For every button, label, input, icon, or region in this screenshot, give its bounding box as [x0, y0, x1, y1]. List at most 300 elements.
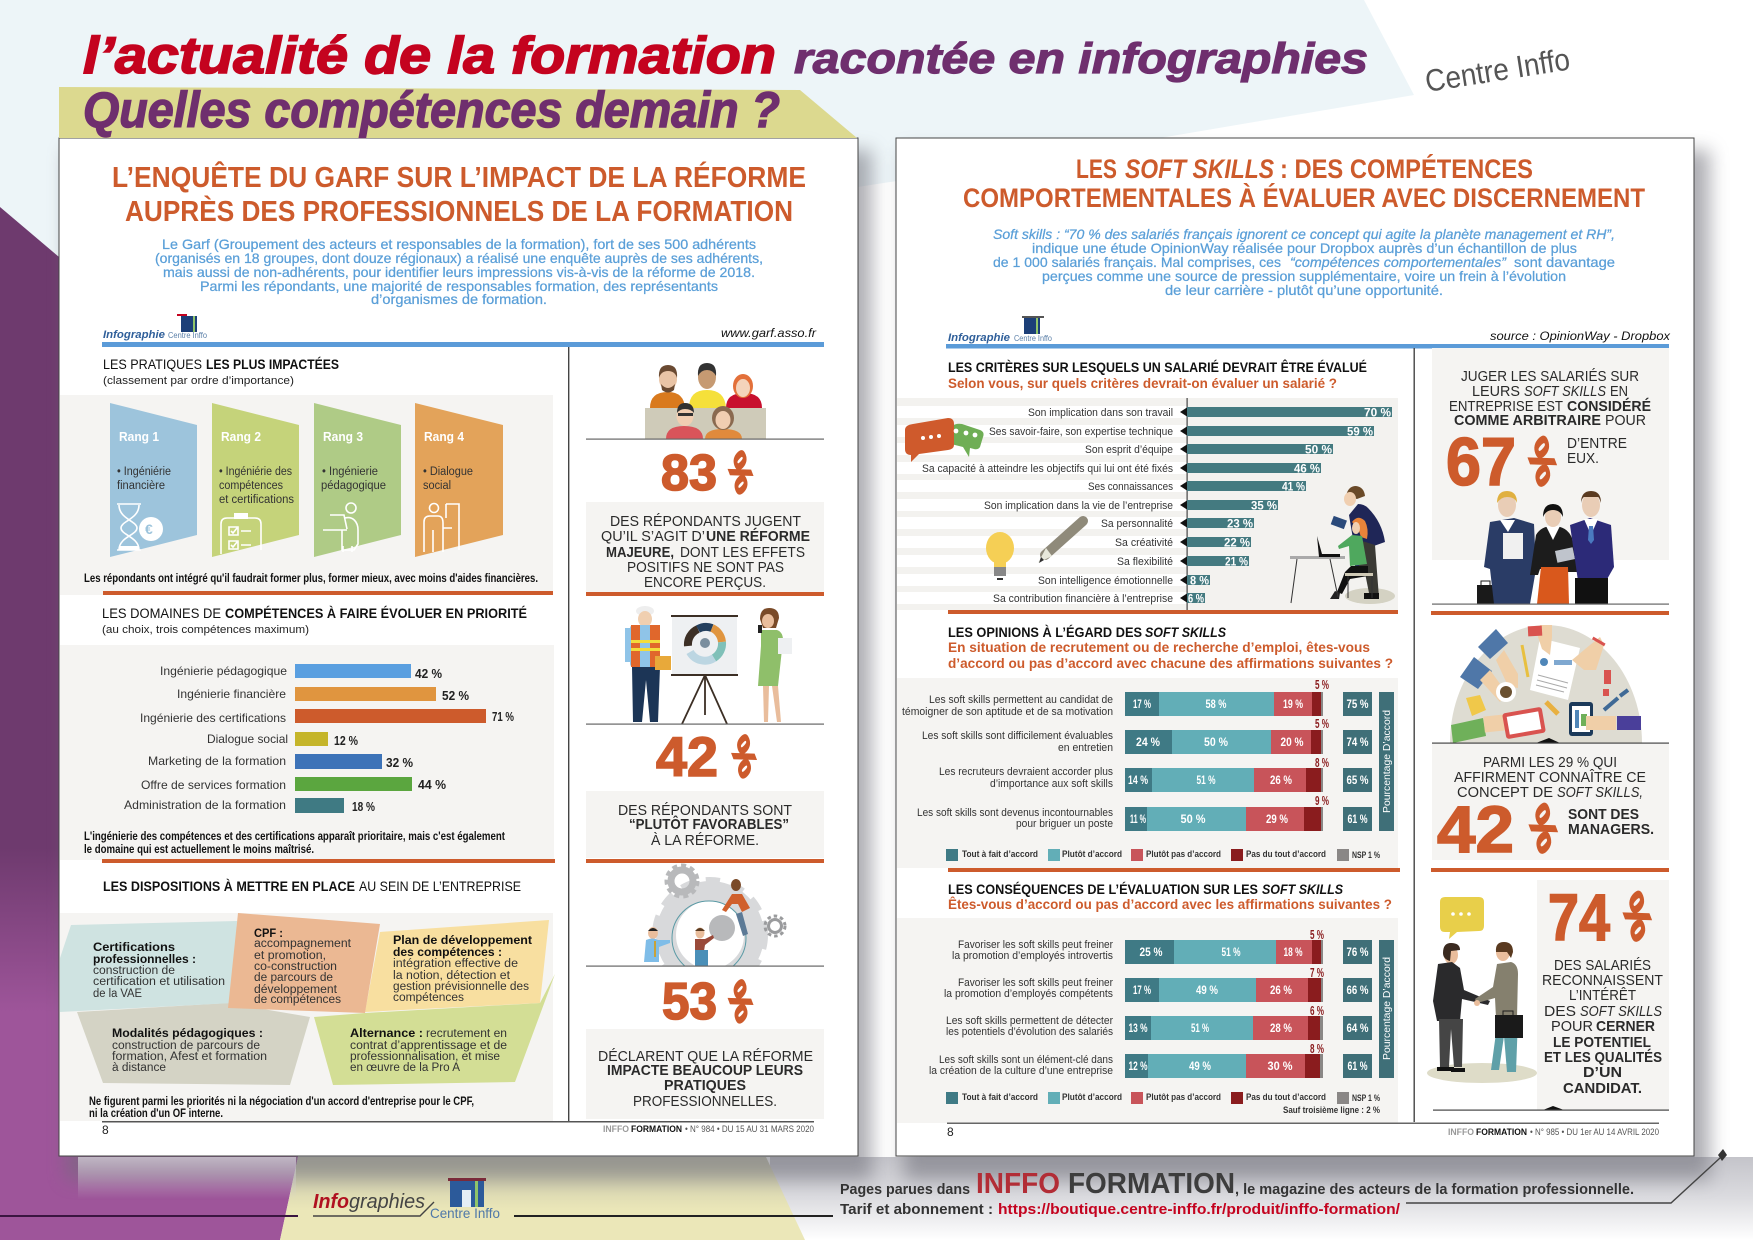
side label — [1379, 692, 1394, 831]
horizontal bar chart: 6 % — [1188, 592, 1204, 606]
horizontal bar chart: 22 % — [1224, 536, 1250, 550]
sidebar stat: 67 %: ENTREPRISE EST — [1449, 398, 1563, 415]
row 1: Les soft skills permettent au candidat de — [929, 694, 1113, 706]
legend: Plutôt d’accord — [1062, 1092, 1122, 1103]
legend: Sauf troisième ligne : 2 % — [1283, 1105, 1380, 1116]
sidebar stat: 67 %: EN — [1610, 383, 1628, 400]
section heading — [948, 625, 1393, 671]
bar chart: 52 % — [442, 688, 469, 703]
sidebar stat: 67 %: 67 — [1446, 424, 1516, 500]
text block: 53 — [586, 1029, 824, 1119]
block: CPF: CPF : — [254, 928, 283, 940]
row 3: Les soft skills permettent de détecter — [946, 1015, 1113, 1027]
rank 3: Rang 3 — [323, 430, 363, 444]
sidebar stat: 67 %: POUR — [1605, 412, 1646, 429]
stat: 83 %: % — [722, 443, 759, 502]
row 4: 61 % — [1348, 814, 1368, 826]
section heading: SOFT SKILLS — [1262, 882, 1343, 897]
footer: • N° 984 • DU 15 AU 31 MARS 2020 — [685, 1124, 814, 1134]
row 4: Les soft skills sont devenus incontournables — [917, 807, 1113, 819]
block: certifications: construction de — [93, 965, 175, 977]
row 3: 26 % — [1270, 775, 1292, 787]
row 2: Favoriser les soft skills peut freiner — [958, 977, 1113, 989]
section heading — [102, 606, 527, 636]
horizontal bar chart: Son implication dans la vie de l’entreprise — [984, 500, 1173, 512]
stat: 83 %: 83 — [661, 444, 717, 501]
rank 1: • Ingéniérie — [117, 466, 171, 478]
legend: NSP 1 % — [1352, 1093, 1380, 1104]
page heading: L’ENQUÊTE DU GARF SUR L’IMPACT DE LA RÉFORME — [112, 160, 806, 194]
panel: right page — [896, 138, 1694, 1156]
sidebar stat: 67 %: COMME ARBITRAIRE — [1454, 412, 1601, 429]
legend: Tout à fait d’accord — [962, 1092, 1038, 1103]
intro text: sont davantage — [1514, 254, 1615, 270]
text block: 83: POSITIFS NE SONT PAS — [627, 559, 784, 576]
sidebar stat: 42 %: CONCEPT DE — [1457, 784, 1553, 801]
block: CPF: et promotion, — [254, 950, 326, 962]
row 4: 29 % — [1266, 814, 1288, 826]
infographie credit — [103, 314, 207, 341]
infographie credit: Centre Inffo — [1014, 333, 1052, 343]
row 4: la création de la culture d’une entreprise — [929, 1065, 1113, 1077]
section: critères — [897, 360, 1398, 610]
rank 3 — [314, 403, 401, 557]
stat: 83 % — [661, 443, 759, 502]
legend — [946, 1092, 1380, 1116]
row 1 — [952, 927, 1372, 964]
horizontal bar chart: Sa flexibilité — [1117, 556, 1173, 568]
section: dispositions — [60, 879, 555, 1121]
row 3: 14 % — [1128, 775, 1148, 787]
bar chart: Dialogue social — [207, 732, 288, 746]
sidebar stat: 74 %: ET LES QUALITÉS — [1544, 1049, 1662, 1066]
row 1: 17 % — [1133, 699, 1151, 711]
section heading: LES OPINIONS À L’ÉGARD DES — [948, 625, 1142, 640]
text block: 53: DÉCLARENT QUE LA RÉFORME — [598, 1048, 813, 1065]
intro text: mais aussi de non-adhérents, pour identifier leurs impressions vis-à-vis de la réforme de 2018. — [163, 264, 755, 280]
sidebar stat: 67 %: EUX. — [1567, 450, 1599, 467]
horizontal bar chart: Sa contribution financière à l’entreprise — [993, 593, 1173, 605]
footer: FORMATION — [631, 1124, 682, 1134]
footer — [1448, 1127, 1659, 1137]
horizontal bar chart: 35 % — [1251, 498, 1277, 512]
sidebar stat: 67 %: LEURS — [1472, 383, 1520, 400]
sidebar stat: 67 % — [1432, 348, 1669, 604]
section heading: (classement par ordre d’importance) — [103, 375, 294, 387]
footer: magazine credit — [840, 1168, 1634, 1218]
legend: Plutôt pas d’accord — [1146, 849, 1221, 860]
block: modalités — [77, 1003, 310, 1085]
row 4 — [917, 793, 1372, 831]
row 2: 50 % — [1204, 737, 1228, 749]
row 4: pour briguer un poste — [1016, 818, 1113, 830]
text block: 53: PRATIQUES — [664, 1077, 746, 1094]
footer: FORMATION — [1476, 1127, 1527, 1137]
row 3: 51 % — [1191, 1023, 1209, 1035]
side label: Pourcentage D’accord — [1381, 957, 1393, 1060]
sidebar stat: 74 %: RECONNAISSENT — [1542, 972, 1663, 989]
horizontal bar chart: Son implication dans son travail — [1028, 407, 1173, 419]
main title — [83, 27, 1368, 85]
sidebar stat: 74 %: CERNER — [1596, 1018, 1655, 1035]
icon: hourglass and euro — [117, 504, 163, 550]
row 1: 76 % — [1346, 947, 1368, 959]
row 4 — [929, 1041, 1372, 1078]
rank 4 — [415, 403, 503, 557]
block: certifications — [60, 921, 237, 1012]
sidebar stat: 67 %: CONSIDÉRÉ — [1567, 398, 1651, 415]
sidebar stat: 74 %: POUR — [1551, 1018, 1593, 1035]
footer: magazine credit: INFFO — [976, 1168, 1060, 1200]
sidebar stat: 42 %: 42 — [1437, 792, 1514, 866]
section heading: LES DOMAINES DE — [102, 606, 221, 621]
sidebar stat: 74 %: LE POTENTIEL — [1553, 1034, 1651, 1051]
text block: 53: IMPACTE BEAUCOUP LEURS — [607, 1062, 803, 1079]
block: alternance: en œuvre de la Pro A — [350, 1062, 460, 1074]
row 3: les potentiels d’évolution des salariés — [946, 1026, 1113, 1038]
stat: 42 %: 42 — [656, 725, 718, 788]
text block: 42 — [586, 791, 824, 858]
row 2: en entretien — [1058, 742, 1113, 754]
block: plan: Plan de développement — [393, 935, 532, 947]
intro text: perçues comme une source de pression supplémentaire, voire un frein à l’évolution — [1042, 268, 1566, 284]
text block: 83: ENCORE PERÇUS. — [644, 574, 766, 591]
illustration: audience — [645, 363, 766, 439]
intro text: (organisés en 18 groupes, dont douze régionaux) a réalisé une enquête auprès de ses adhérents, — [155, 250, 763, 266]
panel: left page — [59, 138, 858, 1156]
horizontal bar chart: Sa créativité — [1115, 537, 1173, 549]
row 3: d’importance aux soft skills — [990, 778, 1113, 790]
arrow — [1406, 1149, 1727, 1203]
main title: l’actualité de la formation — [83, 27, 776, 85]
row 1: témoigner de son aptitude et de sa motivation — [902, 706, 1113, 718]
block: plan: compétences — [393, 992, 464, 1004]
block: alternance — [314, 974, 555, 1085]
intro text: d’organismes de formation. — [371, 291, 547, 307]
block: CPF: accompagnement — [254, 938, 352, 950]
bar chart: 44 % — [418, 777, 446, 792]
intro text: indique une étude OpinionWay réalisée pour Dropbox auprès d’un échantillon de plus — [1032, 240, 1577, 256]
row 3 — [939, 755, 1372, 792]
sidebar stat: 74 %: L’INTÉRÊT — [1569, 987, 1636, 1004]
stat: 53 % — [662, 972, 759, 1031]
row 3: Les recruteurs devraient accorder plus — [939, 766, 1113, 778]
block: certifications: certification et utilisation — [93, 976, 225, 988]
footer band: infographies logo: Info — [313, 1191, 349, 1213]
rank 4: Rang 4 — [424, 430, 464, 444]
section heading — [948, 882, 1392, 912]
rank 2: compétences — [219, 480, 283, 492]
sidebar stat: 42 % — [1432, 744, 1669, 866]
block: alternance: recrutement en — [426, 1028, 507, 1040]
horizontal bar chart: Ses savoir-faire, son expertise technique — [989, 426, 1173, 438]
sidebar stat: 67 %: % — [1521, 427, 1564, 496]
illustration: handshake — [1427, 897, 1537, 1083]
page heading — [963, 153, 1645, 213]
legend: Tout à fait d’accord — [962, 849, 1038, 860]
sidebar stat: 42 %: SOFT SKILLS, — [1557, 784, 1643, 801]
bar chart: 42 % — [415, 666, 442, 681]
flip chart — [671, 615, 738, 724]
footer: magazine credit: Tarif et abonnement : — [840, 1201, 993, 1218]
bar chart: 71 % — [492, 709, 514, 724]
sidebar stat: 74 %: CANDIDAT. — [1563, 1080, 1642, 1097]
horizontal bar chart: 50 % — [1305, 442, 1332, 456]
intro text: Le Garf (Groupement des acteurs et responsables de la formation), fort de ses 500 adhérents — [162, 236, 756, 252]
icon: bulb and pencil — [986, 521, 1083, 580]
row 3: 8 % — [1315, 755, 1329, 770]
block: CPF — [228, 913, 380, 1013]
section heading: LES PLUS IMPACTÉES — [206, 357, 339, 372]
row 2: Les soft skills sont difficilement évaluables — [922, 730, 1113, 742]
row 1: 5 % — [1310, 927, 1324, 942]
text block: 83: DONT LES EFFETS — [680, 544, 805, 561]
row 2 — [922, 716, 1372, 754]
section: conséquences — [897, 882, 1398, 1123]
icon: person at door — [424, 504, 459, 552]
legend: Plutôt d’accord — [1062, 849, 1122, 860]
side label — [1379, 940, 1394, 1078]
bar chart: 18 % — [352, 799, 375, 814]
block: alternance: contrat d’apprentissage et de — [350, 1040, 507, 1052]
stat: 42 %: % — [725, 727, 763, 786]
section heading: (au choix, trois compétences maximum) — [102, 624, 309, 636]
footer: • N° 985 • DU 1er AU 14 AVRIL 2020 — [1530, 1127, 1659, 1137]
illustration: three professionals — [1477, 491, 1614, 604]
text block: 83 — [586, 502, 824, 592]
row 2: 7 % — [1310, 965, 1324, 980]
text block: 42: À LA RÉFORME. — [651, 832, 759, 849]
legend: Pas du tout d’accord — [1246, 1092, 1326, 1103]
section heading: En situation de recrutement ou de recherche d’emploi, êtes-vous — [948, 640, 1370, 655]
row 2: 20 % — [1280, 737, 1304, 749]
block: CPF: développement — [254, 984, 338, 996]
block: modalités: formation, Afest et formation — [112, 1051, 267, 1063]
row 2: 74 % — [1346, 737, 1368, 749]
page heading: LES — [1076, 154, 1117, 184]
sidebar stat: 74 %: % — [1616, 882, 1659, 951]
row 1: 58 % — [1206, 699, 1226, 711]
block: certifications: Certifications — [93, 942, 175, 954]
row 4: 30 % — [1268, 1061, 1292, 1073]
section heading — [103, 879, 521, 894]
worker — [625, 606, 671, 722]
subtitle banner: Quelles compétences demain ? — [83, 82, 780, 138]
bar chart: 12 % — [334, 733, 358, 748]
section heading: COMPÉTENCES À FAIRE ÉVOLUER EN PRIORITÉ — [225, 606, 527, 621]
intro text — [155, 236, 763, 307]
infographie credit — [948, 316, 1052, 344]
rank 1 — [110, 403, 197, 557]
row 3: 51 % — [1196, 775, 1216, 787]
rank 2: et certifications — [219, 494, 294, 506]
sidebar stat: 42 %: MANAGERS. — [1568, 821, 1654, 838]
legend: Pas du tout d’accord — [1246, 849, 1326, 860]
horizontal bar chart: Sa personnalité — [1101, 518, 1173, 530]
icon: hourglass and euro: € — [145, 521, 153, 537]
section heading: LES DISPOSITIONS À METTRE EN PLACE — [103, 879, 355, 894]
horizontal bar chart: 70 % — [1364, 406, 1391, 420]
page heading — [112, 160, 806, 228]
row 4: Les soft skills sont un élément-clé dans — [939, 1054, 1113, 1066]
horizontal bar chart: Sa capacité à atteindre les objectifs qui lui ont été fixés — [922, 463, 1173, 475]
legend: Plutôt pas d’accord — [1146, 1092, 1221, 1103]
row 1: 5 % — [1315, 677, 1329, 692]
infographie credit: Infographie — [103, 329, 165, 341]
sidebar stat: 74 %: DES SALARIÉS — [1554, 957, 1651, 974]
block: plan: intégration effective de — [393, 958, 518, 970]
row 4: 49 % — [1189, 1061, 1211, 1073]
block: certifications: de la VAE — [93, 988, 142, 1000]
bar chart: Ingénierie financière — [177, 687, 286, 701]
stacked bar chart — [902, 677, 1394, 831]
horizontal bar chart: 41 % — [1282, 480, 1305, 494]
illustration: colleagues at desk — [1290, 486, 1395, 604]
text block: 83: QU’IL S’AGIT D’ — [601, 528, 705, 545]
sidebar stat: 42 %: SONT DES — [1568, 806, 1639, 823]
text block: 53: PROFESSIONNELLES. — [633, 1093, 777, 1110]
row 4: 9 % — [1315, 793, 1329, 808]
row 1: Favoriser les soft skills peut freiner — [958, 939, 1113, 951]
footer: magazine credit: , le magazine des acteurs de la formation professionnelle. — [1235, 1181, 1634, 1198]
horizontal bar chart: 46 % — [1294, 462, 1320, 476]
row 2: 49 % — [1196, 985, 1218, 997]
rank 2 — [212, 403, 299, 557]
block: modalités: à distance — [112, 1062, 166, 1074]
intro text: de 1 000 salariés français. Mal comprises, ces — [993, 254, 1281, 270]
block: CPF: de compétences — [254, 994, 341, 1006]
section: opinions — [897, 625, 1398, 868]
rank 2: • Ingéniérie des — [219, 466, 292, 478]
row 4: 50 % — [1180, 814, 1206, 826]
text block: 42: “PLUTÔT FAVORABLES” — [629, 815, 789, 833]
infographie credit: Infographie — [948, 332, 1010, 344]
stat: 53 %: % — [722, 972, 759, 1031]
row 2 — [944, 965, 1372, 1002]
rank 2: Rang 2 — [221, 430, 261, 444]
sidebar stat: 42 %: AFFIRMENT CONNAÎTRE CE — [1454, 769, 1646, 786]
row 3: 28 % — [1270, 1023, 1292, 1035]
legend — [946, 849, 1380, 861]
page number: 8 — [947, 1125, 954, 1139]
horizontal bar chart — [922, 406, 1392, 606]
section: pratiques — [60, 357, 553, 595]
bar chart: Ingénierie pédagogique — [160, 664, 287, 678]
stat: 53 %: 53 — [662, 973, 717, 1031]
sidebar stat: 74 %: SOFT SKILLS — [1580, 1003, 1662, 1020]
stat: 42 % — [656, 725, 763, 788]
row 1: 51 % — [1222, 947, 1240, 959]
section heading — [948, 360, 1367, 391]
bar chart — [124, 664, 514, 814]
row 2: 17 % — [1133, 985, 1151, 997]
rank 1: financière — [117, 480, 165, 492]
footer band: infographies logo — [0, 1178, 833, 1221]
block: plan — [365, 920, 549, 1012]
footer — [603, 1124, 814, 1134]
intro text — [993, 226, 1615, 298]
sidebar stat: 74 %: DES — [1544, 1003, 1576, 1020]
legend: NSP 1 % — [1352, 850, 1380, 861]
stacked bar chart — [929, 927, 1394, 1078]
row 2: 66 % — [1346, 985, 1368, 997]
infographie credit: Centre Inffo — [168, 330, 207, 340]
icon: clipboard — [221, 513, 261, 554]
text block: 42: DES RÉPONDANTS SONT — [618, 802, 792, 819]
sidebar stat: 67 %: D’ENTRE — [1567, 435, 1627, 452]
note: ni la création d'un OF interne. — [89, 1108, 223, 1120]
note: le domaine qui est actuellement le moins maîtrisé. — [84, 844, 314, 856]
footer band: infographies logo: Centre Inffo — [430, 1205, 500, 1221]
footer: INFFO — [603, 1124, 629, 1134]
woman — [758, 608, 792, 722]
horizontal bar chart: 21 % — [1225, 554, 1248, 568]
people — [644, 879, 750, 966]
intro text: Parmi les répondants, une majorité de responsables formation, des représentants — [200, 278, 718, 294]
row 3: 65 % — [1346, 775, 1368, 787]
footer band: infographies logo: graphies — [349, 1191, 425, 1213]
main title: racontée en infographies — [794, 35, 1368, 83]
note: Les répondants ont intégré qu'il faudrait former plus, former mieux, avec moins d'aides financières. — [84, 573, 538, 585]
side label: Pourcentage D’accord — [1381, 710, 1393, 813]
illustration: hands around table — [1450, 625, 1642, 742]
footer: magazine credit: https://boutique.centre-inffo.fr/produit/inffo-formation/ — [998, 1201, 1401, 1218]
horizontal bar chart: 8 % — [1190, 574, 1209, 588]
row 1: 18 % — [1284, 947, 1302, 959]
section: domaines — [60, 606, 554, 860]
bar chart: 32 % — [386, 755, 413, 770]
section heading: d’accord ou pas d’accord avec chacune des affirmations suivantes ? — [948, 656, 1393, 671]
row 1: la promotion d’employés introvertis — [952, 950, 1113, 962]
page heading: SOFT SKILLS — [1125, 154, 1274, 184]
sidebar stat: 42 %: PARMI LES 29 % QUI — [1483, 754, 1617, 771]
section heading: Êtes-vous d’accord ou pas d’accord avec les affirmations suivantes ? — [948, 897, 1392, 912]
section heading: LES CRITÈRES SUR LESQUELS UN SALARIÉ DEVRAIT ÊTRE ÉVALUÉ — [948, 360, 1367, 375]
rank 4: social — [423, 480, 451, 492]
bar chart: Marketing de la formation — [148, 754, 286, 768]
row 3: 6 % — [1310, 1003, 1324, 1018]
row 4: 11 % — [1130, 814, 1146, 826]
footer: magazine credit: FORMATION — [1068, 1168, 1235, 1200]
section heading: LES CONSÉQUENCES DE L’ÉVALUATION SUR LES — [948, 882, 1258, 897]
sidebar stat: 74 %: D’UN — [1583, 1064, 1622, 1081]
horizontal bar chart: 23 % — [1227, 516, 1253, 530]
page heading: COMPORTEMENTALES À ÉVALUER AVEC DISCERNEMENT — [963, 182, 1645, 213]
source: source : OpinionWay - Dropbox — [1490, 329, 1671, 343]
bar chart: Administration de la formation — [124, 798, 286, 812]
row 2: 24 % — [1136, 737, 1160, 749]
horizontal bar chart: 59 % — [1347, 424, 1373, 438]
section heading: LES PRATIQUES — [103, 357, 202, 372]
note: L'ingénierie des compétences et des certifications apparaît prioritaire, mais c'est également — [84, 831, 505, 843]
rank 4: • Dialogue — [423, 466, 473, 478]
note — [89, 1096, 474, 1120]
row 3: 13 % — [1128, 1023, 1148, 1035]
section heading: AU SEIN DE L’ENTREPRISE — [359, 879, 521, 894]
intro text: “compétences comportementales” — [1290, 254, 1507, 270]
horizontal bar chart: Son intelligence émotionnelle — [1038, 575, 1173, 587]
logo: Centre Inffo: Centre Inffo — [1423, 42, 1572, 99]
sidebar stat: 67 %: JUGER LES SALARIÉS SUR — [1461, 368, 1639, 385]
block: alternance: Alternance : — [350, 1028, 423, 1040]
row 1: 19 % — [1283, 699, 1303, 711]
row 3 — [946, 1003, 1372, 1040]
block: CPF: co-construction — [254, 961, 337, 973]
footer: INFFO — [1448, 1127, 1474, 1137]
text block: 83: MAJEURE, — [606, 544, 674, 561]
row 4: 8 % — [1310, 1041, 1324, 1056]
block: plan: la notion, détection et — [393, 970, 511, 982]
